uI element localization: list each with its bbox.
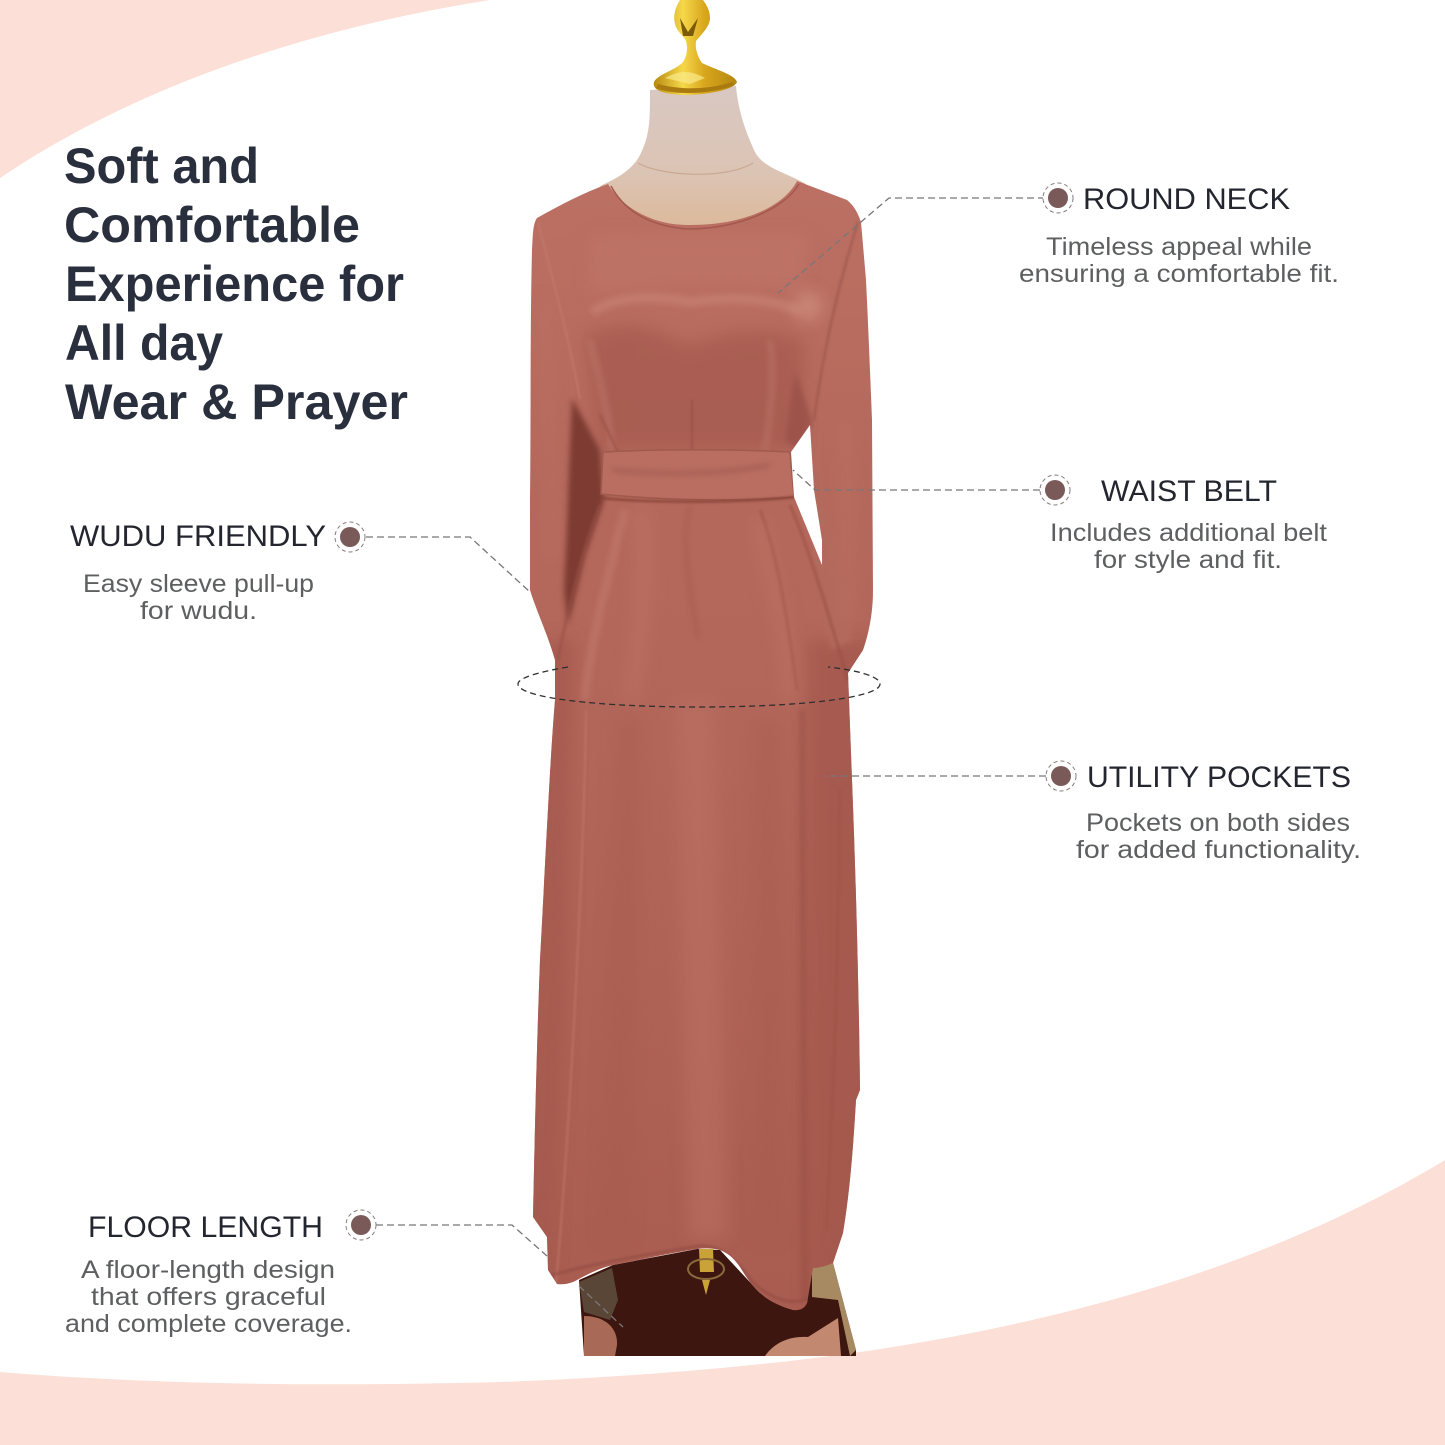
neckline stitch bbox=[611, 184, 799, 229]
callout: waist belt bbox=[793, 470, 1327, 574]
callout: floor length: and complete coverage. bbox=[65, 1310, 352, 1338]
callout: wudu friendly: for wudu. bbox=[140, 597, 257, 625]
callout: utility pockets: UTILITY POCKETS bbox=[1087, 761, 1351, 794]
mannequin neck bbox=[600, 86, 806, 232]
callout: round neck bbox=[778, 183, 1339, 293]
background: bottom pink curve bbox=[0, 1160, 1445, 1445]
dress shading and folds bbox=[520, 222, 880, 1330]
callout: floor length: A floor-length design bbox=[81, 1256, 335, 1284]
title: Experience for bbox=[65, 256, 404, 312]
background: top-left pink curve bbox=[0, 0, 490, 178]
callout: utility pockets: Pockets on both sides bbox=[1086, 809, 1350, 837]
callout: wudu friendly: Easy sleeve pull-up bbox=[83, 570, 314, 598]
callout: waist belt: Includes additional belt bbox=[1050, 519, 1327, 547]
callout: floor length: FLOOR LENGTH bbox=[88, 1211, 323, 1244]
title: Wear & Prayer bbox=[65, 374, 408, 430]
skirt side bands bbox=[533, 634, 570, 1282]
neck base seam bbox=[638, 163, 753, 174]
dashed oval marking pockets bbox=[518, 667, 880, 707]
title: Soft and bbox=[64, 138, 259, 194]
callout: utility pockets bbox=[825, 761, 1361, 864]
sleeve seams bbox=[572, 360, 580, 396]
white gap between right sleeve and body bbox=[791, 425, 822, 565]
callout: utility pockets: for added functionality. bbox=[1076, 836, 1361, 864]
skirt pleats below belt bbox=[558, 505, 848, 690]
callout: wudu friendly bbox=[70, 520, 530, 625]
callout: round neck: Timeless appeal while bbox=[1046, 233, 1312, 261]
callout: waist belt: for style and fit. bbox=[1094, 546, 1282, 574]
title: All day bbox=[65, 315, 223, 371]
mannequin gold finial bbox=[654, 0, 737, 95]
dress bbox=[520, 181, 880, 1330]
callout: floor length bbox=[65, 1210, 623, 1338]
shadow between left sleeve and body bbox=[564, 398, 604, 625]
upper bodice lighting bbox=[590, 235, 810, 295]
dress base silhouette bbox=[530, 181, 873, 1310]
callout: round neck: ROUND NECK bbox=[1083, 183, 1290, 216]
callout: floor length: that offers graceful bbox=[91, 1283, 326, 1311]
belt bbox=[601, 450, 794, 500]
mannequin base bbox=[579, 1249, 856, 1356]
callout: waist belt: WAIST BELT bbox=[1101, 475, 1277, 508]
callout: round neck: ensuring a comfortable fit. bbox=[1019, 260, 1339, 288]
title bbox=[64, 138, 408, 430]
title: Comfortable bbox=[64, 197, 360, 253]
callout: wudu friendly: WUDU FRIENDLY bbox=[70, 520, 326, 553]
